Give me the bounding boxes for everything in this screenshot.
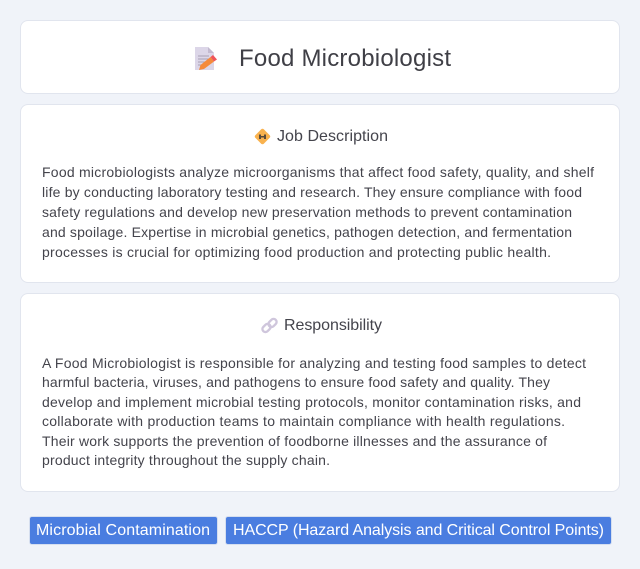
icon: diamond sign: [254, 128, 270, 144]
text: responsibility body: [42, 355, 586, 468]
icon: document with pencil: [195, 47, 217, 70]
text: responsibility body: A Food Microbiologist is responsible for analyzing and testing food samples to detect: [42, 355, 586, 371]
text: job description body: [42, 164, 594, 260]
text: job description body: safety regulations and develop new preservation methods to prevent contamination: [42, 204, 572, 220]
panel: title header: [20, 20, 620, 94]
text: responsibility body: Their work supports the prevention of foodborne illnesses and the assurance of: [42, 433, 547, 449]
title: Food Microbiologist: [239, 45, 451, 72]
panel: responsibility: [20, 293, 620, 492]
tag: HACCP: HACCP (Hazard Analysis and Critical Control Points): [233, 522, 604, 539]
tag: microbial contamination: [29, 516, 218, 545]
heading: responsibility: Responsibility: [284, 317, 382, 334]
tag: HACCP: [225, 516, 612, 545]
tag: microbial contamination: Microbial Contamination: [36, 522, 210, 539]
text: job description body: and spoilage. Expertise in microbial genetics, pathogen detection, and fermentation: [42, 224, 572, 240]
heading: job description: Job Description: [277, 128, 388, 145]
text: responsibility body: develop and implement microbial testing protocols, monitor contamination risks, and: [42, 394, 581, 410]
text: job description body: Food microbiologists analyze microorganisms that affect food safety, quality, and shelf: [42, 164, 594, 180]
text: job description body: processes is crucial for optimizing food production and protecting public health.: [42, 244, 551, 260]
icon: chain link: [261, 318, 278, 334]
text: responsibility body: harmful bacteria, viruses, and pathogens to ensure food safety and quality. They: [42, 374, 550, 390]
text: responsibility body: collaborate with production teams to maintain compliance with health regulations.: [42, 413, 565, 429]
text: responsibility body: product integrity throughout the supply chain.: [42, 452, 330, 468]
panel: job description: [20, 104, 620, 283]
text: job description body: life by conducting laboratory testing and research. They ensure compliance with food: [42, 184, 582, 200]
